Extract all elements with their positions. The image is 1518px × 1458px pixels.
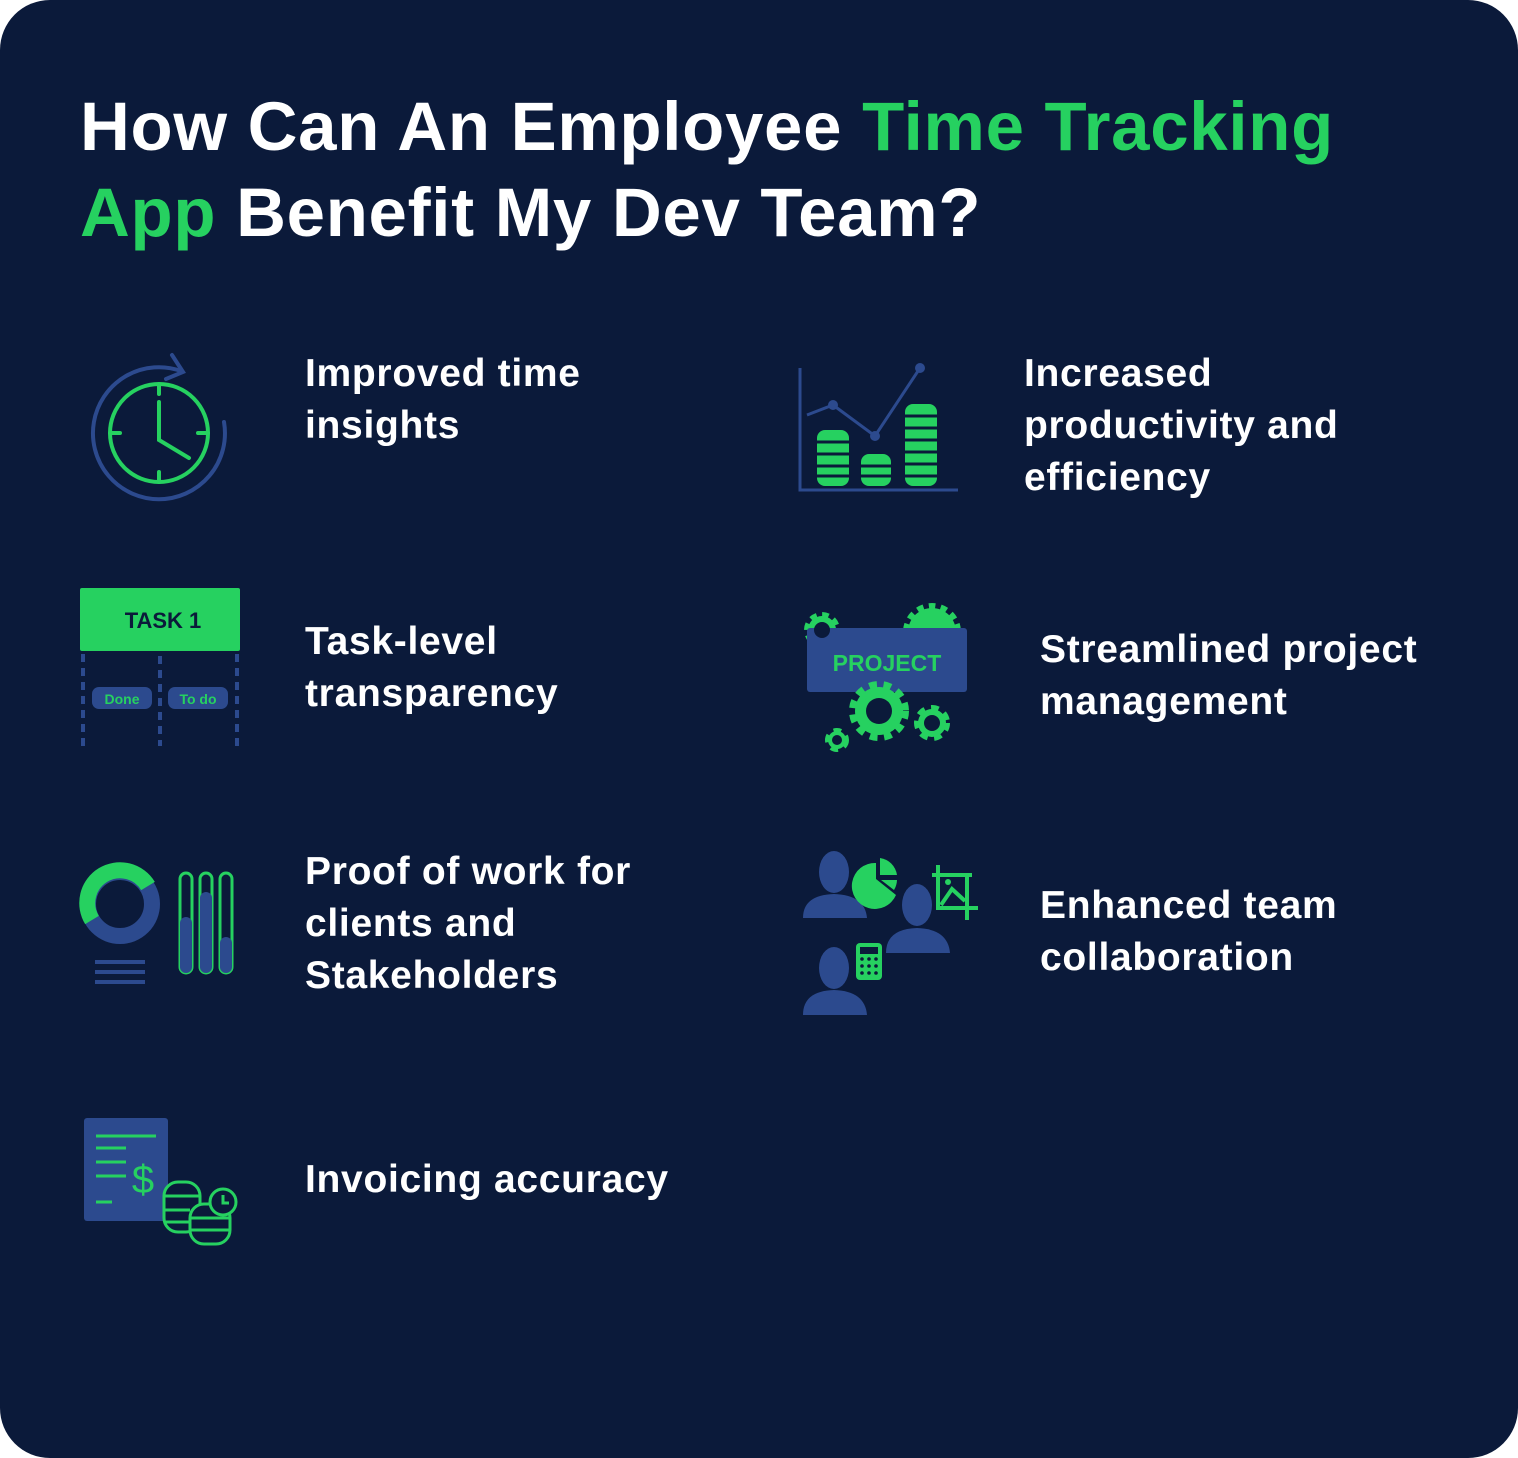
text: improved time insights xyxy=(305,352,581,447)
title xyxy=(80,88,1334,251)
title: App Benefit My Dev Team? xyxy=(80,174,981,251)
icon: task board: TASK 1 xyxy=(125,608,201,633)
text: enhanced team collaboration: Enhanced team xyxy=(1040,884,1337,927)
icon: project gears: PROJECT xyxy=(833,650,941,676)
icon: clock xyxy=(91,352,227,502)
text: improved time insights: insights xyxy=(305,404,460,447)
text: enhanced team collaboration xyxy=(1040,884,1337,979)
text: streamlined project management: Streamlined project xyxy=(1040,628,1417,671)
text: increased productivity xyxy=(1024,352,1339,499)
text: proof of work: clients and xyxy=(305,902,516,945)
icon: invoice with coins: $ xyxy=(132,1158,154,1202)
icon: task board: Done xyxy=(104,691,140,707)
text: increased productivity: efficiency xyxy=(1024,456,1211,499)
icon: task board xyxy=(80,588,240,746)
icon: invoice with coins xyxy=(84,1118,238,1246)
icon: team collaboration xyxy=(803,851,978,1015)
text: increased productivity: Increased xyxy=(1024,352,1212,395)
text: task-level transparency xyxy=(305,620,558,715)
text: invoicing accuracy: Invoicing accuracy xyxy=(305,1158,669,1201)
text: enhanced team collaboration: collaboration xyxy=(1040,936,1294,979)
text: task-level transparency: transparency xyxy=(305,672,558,715)
icon: task board: To do xyxy=(179,691,217,707)
text: streamlined project management: management xyxy=(1040,680,1288,723)
text: streamlined project management xyxy=(1040,628,1417,723)
text: proof of work xyxy=(305,850,631,997)
text: proof of work: Proof of work for xyxy=(305,850,631,893)
icon: project gears xyxy=(804,603,967,752)
title: How Can An Employee Time Tracking xyxy=(80,88,1334,165)
icon: donut and bars xyxy=(79,862,234,984)
text: improved time insights: Improved time xyxy=(305,352,581,395)
text: task-level transparency: Task-level xyxy=(305,620,498,663)
text: proof of work: Stakeholders xyxy=(305,954,558,997)
text: increased productivity: productivity and xyxy=(1024,404,1339,447)
icon: chart with coins xyxy=(798,363,958,492)
